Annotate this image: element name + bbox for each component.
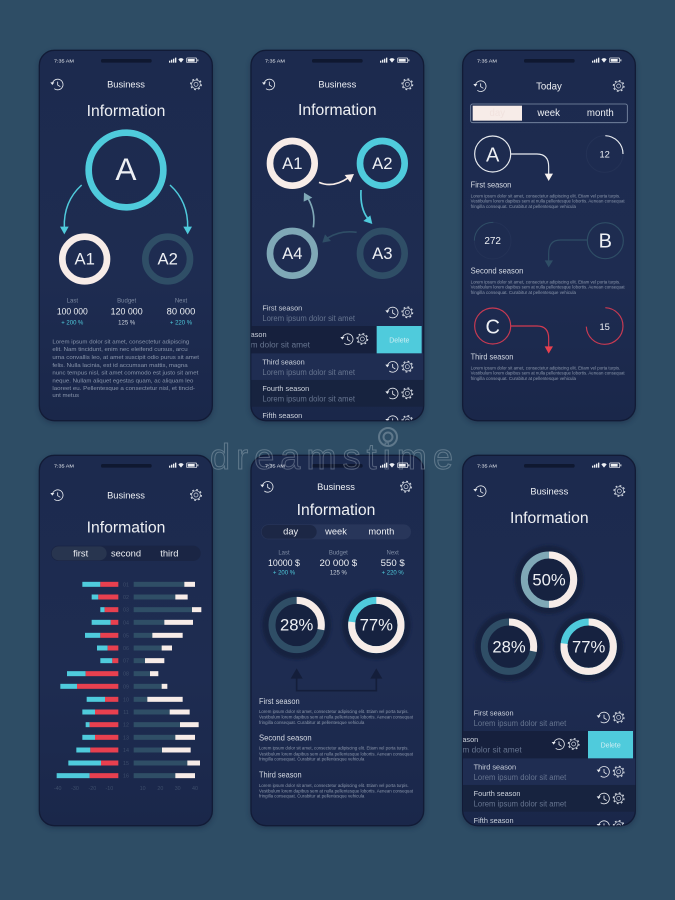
node B xyxy=(587,223,623,259)
row labels: 16 xyxy=(123,774,129,780)
axis labels: 10 xyxy=(140,786,146,792)
node A1 xyxy=(270,141,315,186)
segmented control: third xyxy=(160,548,178,558)
row: fifth season: Fifth season xyxy=(262,411,302,420)
row: third season: Lorem ipsum dolor sit amet xyxy=(474,773,567,782)
donut 28% xyxy=(475,612,543,681)
status time: 7:35 AM xyxy=(477,59,497,65)
delete button: Delete xyxy=(389,337,410,344)
header: Business xyxy=(530,486,569,496)
text: second season: Vestibulum lorem dapibus sem at nulla pellentesque lobortis. Aenean consequat xyxy=(471,285,625,290)
text: second season xyxy=(471,279,625,295)
text: first season: fringilla consequat. Curabitur at pellentesque vehicula xyxy=(471,204,576,209)
stat: budget: Budget xyxy=(117,299,136,305)
node A4 xyxy=(270,231,315,276)
node A1: A1 xyxy=(74,249,95,268)
node A1 xyxy=(62,237,107,281)
node A2: A2 xyxy=(372,154,393,173)
delete button xyxy=(377,326,422,353)
donut 77% xyxy=(342,591,411,659)
row: first season: Lorem ipsum dolor sit amet xyxy=(474,719,567,728)
paragraph: felis. Nulla lacinia, est id accumsan mattis, magna xyxy=(52,363,189,369)
gauge 15: 15 xyxy=(599,322,610,332)
row labels xyxy=(123,582,129,780)
text: third season: Vestibulum lorem dapibus sem at nulla pellentesque lobortis. Aenean consequat xyxy=(259,788,414,793)
status time: 7:35 AM xyxy=(54,464,74,470)
node A xyxy=(475,136,511,172)
row labels: 03 xyxy=(123,608,129,614)
icon: settings xyxy=(191,490,201,500)
phone: business tree xyxy=(38,50,214,424)
node A1: A1 xyxy=(282,154,303,173)
row labels: 12 xyxy=(123,723,129,729)
segmented control: month xyxy=(368,526,394,536)
stat: budget: 125 % xyxy=(330,570,347,576)
row: first season: First season xyxy=(262,303,302,312)
header: Business xyxy=(107,490,145,500)
connector arrows xyxy=(291,668,382,691)
icon: history xyxy=(50,79,63,90)
title: Information xyxy=(298,102,377,119)
row: fourth season xyxy=(474,790,625,808)
node A4: A4 xyxy=(282,244,303,263)
left bars xyxy=(57,582,118,778)
row: swiped: m dolor sit amet xyxy=(251,341,311,350)
stat: last xyxy=(57,299,88,326)
text: second season: fringilla consequat. Curabitur at pellentesque vehicula xyxy=(471,290,576,295)
text: first season: Vestibulum lorem dapibus sem at nulla pellentesque lobortis. Aenean consequat xyxy=(259,715,414,720)
segmented control: week xyxy=(324,526,347,536)
text: first season xyxy=(259,709,414,725)
paragraph: nunc tempus nisl, sit amet commodo est justo sit amet xyxy=(52,371,199,377)
paragraph xyxy=(52,339,199,399)
text: second season: Lorem ipsum dolor sit amet, consectetur adipiscing elit. Etiam vel porta turpis. xyxy=(259,746,409,751)
row: first season: Lorem ipsum dolor sit amet xyxy=(262,314,356,323)
row: first season: First season xyxy=(474,708,514,717)
phone: business cycle and list xyxy=(250,50,425,427)
gauge 15 xyxy=(586,308,623,344)
title: Information xyxy=(510,510,589,527)
row: third season: Lorem ipsum dolor sit amet xyxy=(262,368,356,377)
node C xyxy=(475,308,511,344)
title: Information xyxy=(87,103,165,120)
node A: A xyxy=(115,151,137,187)
axis labels xyxy=(54,786,198,792)
stat: budget xyxy=(111,299,143,326)
text: third season: Vestibulum lorem dapibus sem at nulla pellentesque lobortis. Aenean consequat xyxy=(471,371,625,376)
stat: next xyxy=(381,550,405,576)
segmented control xyxy=(471,104,627,123)
paragraph: laoreet eu. Pellentesque a consectetur nisl, et tincid- xyxy=(52,386,195,392)
watermark: dreamstime xyxy=(210,436,453,477)
stat: next: 80 000 xyxy=(167,306,195,316)
arrow A1 to A2 xyxy=(319,174,354,184)
row: swiped xyxy=(463,738,580,752)
row: first season xyxy=(262,303,413,323)
arrow A4 to A1 xyxy=(304,193,314,227)
row labels: 14 xyxy=(123,748,129,754)
row: fourth season: Fourth season xyxy=(262,384,309,393)
header: Business xyxy=(317,482,355,492)
stat: budget: 20 000 $ xyxy=(319,558,358,568)
row labels: 04 xyxy=(123,620,129,626)
header: Business xyxy=(318,79,357,89)
node A3: A3 xyxy=(372,244,393,263)
right bars xyxy=(134,582,201,778)
list xyxy=(462,708,636,832)
axis labels: -10 xyxy=(105,786,113,792)
heading: third season: Third season xyxy=(471,352,514,362)
donut 77%: 77% xyxy=(360,616,393,635)
text: third season: fringilla consequat. Curabitur at pellentesque vehicula xyxy=(471,376,576,381)
row: third season xyxy=(262,357,413,377)
title: Information xyxy=(297,502,375,519)
text: second season xyxy=(259,746,414,762)
text: first season: Lorem ipsum dolor sit amet, consectetur adipiscing elit. Etiam vel porta turpis. xyxy=(471,193,620,198)
status time: 7:35 AM xyxy=(54,59,74,65)
header: Business xyxy=(107,79,145,89)
arrow dark xyxy=(545,240,587,267)
segmented control xyxy=(51,546,201,561)
stat: next: Next xyxy=(387,550,399,556)
row: fourth season: Lorem ipsum dolor sit amet xyxy=(474,800,567,809)
row: swiped xyxy=(251,330,368,350)
paragraph: elit. Nam tincidunt, enim nec eleifend cursus, arcu xyxy=(52,347,188,353)
icon: history xyxy=(260,482,273,492)
icon: history xyxy=(473,486,486,497)
text: third season: Lorem ipsum dolor sit amet, consectetur adipiscing elit. Etiam vel porta turpis. xyxy=(471,365,620,370)
row labels: 08 xyxy=(123,672,129,678)
segmented control: day xyxy=(283,526,299,536)
heading: first season: First season xyxy=(259,696,300,706)
status time: 7:35 AM xyxy=(265,59,285,65)
text: third season: fringilla consequat. Curabitur at pellentesque vehicula xyxy=(259,794,365,799)
segmented control: month xyxy=(587,108,614,119)
stat: next: 550 $ xyxy=(381,558,405,568)
stat: last: 100 000 xyxy=(57,306,88,316)
node B: B xyxy=(599,231,612,253)
stat: budget: Budget xyxy=(329,550,348,556)
node C: C xyxy=(485,316,500,338)
arrow red xyxy=(511,326,553,354)
stat: budget xyxy=(319,550,358,576)
text: first season: fringilla consequat. Curabitur at pellentesque vehicula xyxy=(259,720,365,725)
arrow white xyxy=(511,154,553,181)
row: fifth season xyxy=(262,412,413,420)
paragraph: Lorem ipsum dolor sit amet, consectetur adipiscing xyxy=(52,339,189,345)
text: third season xyxy=(471,365,625,381)
status time: 7:35 AM xyxy=(477,464,497,470)
axis labels: -40 xyxy=(54,786,62,792)
row: fourth season: Fourth season xyxy=(474,789,521,798)
stat: last xyxy=(268,550,301,576)
node A2: A2 xyxy=(157,249,178,268)
row: fourth season xyxy=(262,384,413,404)
row labels: 02 xyxy=(123,595,129,601)
paragraph: urna convallis leo, at amet suscipit odio purus sit amet xyxy=(52,355,199,361)
donut 28%: 28% xyxy=(492,637,526,656)
donut 28% xyxy=(262,591,331,659)
row labels: 10 xyxy=(123,697,129,703)
axis labels: -30 xyxy=(71,786,79,792)
paragraph: neque. Nullam aliquet egestas quam, ac aliquam leo xyxy=(52,378,193,384)
stat: last: 10000 $ xyxy=(268,558,301,568)
text: first season: Vestibulum lorem dapibus sem at nulla pellentesque lobortis. Aenean consequat xyxy=(471,199,625,204)
axis labels: -20 xyxy=(88,786,96,792)
donut 77%: 77% xyxy=(572,637,606,656)
list xyxy=(251,303,424,427)
heading: third season: Third season xyxy=(259,769,302,779)
stat: last: + 200 % xyxy=(61,320,84,326)
heading: first season: First season xyxy=(471,179,512,189)
arrow left xyxy=(60,185,82,234)
text: first season xyxy=(471,193,625,209)
stat: next: + 220 % xyxy=(382,570,404,576)
phone: bar chart xyxy=(38,455,214,829)
phone: donuts with stats xyxy=(250,455,425,829)
row: swiped: ason xyxy=(251,330,267,339)
row: swiped: ason xyxy=(462,735,478,744)
phone: today xyxy=(461,50,637,424)
row labels: 09 xyxy=(123,684,129,690)
gauge 272: 272 xyxy=(484,236,501,247)
node A: A xyxy=(486,144,500,166)
status time: 7:35 AM xyxy=(265,464,285,470)
icon: history xyxy=(473,81,486,92)
row labels: 01 xyxy=(123,582,129,588)
gauge 12 xyxy=(586,136,623,172)
node A3 xyxy=(360,231,405,276)
text: second season: fringilla consequat. Curabitur at pellentesque vehicula xyxy=(259,757,365,762)
header: Today xyxy=(536,81,562,92)
text: third season: Lorem ipsum dolor sit amet, consectetur adipiscing elit. Etiam vel porta turpis. xyxy=(259,783,409,788)
icon: settings xyxy=(191,79,201,90)
node A2 xyxy=(145,237,190,281)
icon: history xyxy=(50,490,63,501)
axis labels: 40 xyxy=(192,786,198,792)
text: first season: Lorem ipsum dolor sit amet, consectetur adipiscing elit. Etiam vel porta turpis. xyxy=(259,709,409,714)
row labels: 11 xyxy=(123,710,129,716)
row: fourth season: Lorem ipsum dolor sit amet xyxy=(262,395,356,404)
paragraph: unt metus xyxy=(52,393,79,399)
icon: settings xyxy=(402,79,413,90)
delete button xyxy=(588,731,633,758)
title: Information xyxy=(87,519,165,536)
row labels: 13 xyxy=(123,735,129,741)
donut 50% xyxy=(515,545,583,614)
phone: three donuts and list xyxy=(461,455,637,832)
segmented control xyxy=(261,524,411,539)
gauge 272 xyxy=(474,222,511,259)
text: third season xyxy=(259,783,414,799)
axis labels: 30 xyxy=(175,786,181,792)
row labels: 15 xyxy=(123,761,129,767)
stat: last: Last xyxy=(278,550,290,556)
text: second season: Vestibulum lorem dapibus sem at nulla pellentesque lobortis. Aenean consequat xyxy=(259,751,414,756)
node A xyxy=(89,133,163,207)
text: second season: Lorem ipsum dolor sit amet, consectetur adipiscing elit. Etiam vel porta turpis. xyxy=(471,279,620,284)
icon: settings xyxy=(614,486,625,496)
stat: last: + 200 % xyxy=(273,570,296,576)
segmented control: week xyxy=(536,108,560,119)
arrow A2 to A3 xyxy=(361,190,372,224)
node A2 xyxy=(360,141,405,186)
arrow A3 to A4 xyxy=(322,232,357,243)
segmented control: second xyxy=(111,548,141,558)
stat: last: Last xyxy=(67,299,78,305)
donut 77% xyxy=(554,612,623,681)
row: fifth season: Fifth season xyxy=(474,816,514,825)
gauge 12: 12 xyxy=(599,149,610,159)
stat: next: + 220 % xyxy=(170,320,193,326)
row: first season xyxy=(474,710,625,728)
icon: settings xyxy=(613,81,624,91)
segmented control: day xyxy=(490,108,505,119)
stat: budget: 120 000 xyxy=(111,306,143,316)
icon: settings xyxy=(401,481,411,492)
axis labels: 20 xyxy=(157,786,163,792)
delete button: Delete xyxy=(601,742,621,749)
row labels: 05 xyxy=(123,633,129,639)
row: third season xyxy=(474,764,625,782)
stat: budget: 125 % xyxy=(118,320,136,326)
donut 28%: 28% xyxy=(280,616,314,635)
heading: second season: Second season xyxy=(471,265,524,275)
row: third season: Third season xyxy=(262,357,305,366)
stat: next xyxy=(167,299,195,326)
row labels: 07 xyxy=(123,659,129,665)
row: fifth season xyxy=(474,818,624,826)
heading: second season: Second season xyxy=(259,733,312,743)
icon: history xyxy=(262,79,275,90)
stat: next: Next xyxy=(175,299,187,305)
row labels: 06 xyxy=(123,646,129,652)
row: swiped: m dolor sit amet xyxy=(462,746,522,755)
donut 50%: 50% xyxy=(532,570,566,589)
row: third season: Third season xyxy=(474,762,516,771)
arrow right xyxy=(170,185,192,234)
segmented control: first xyxy=(73,548,89,558)
